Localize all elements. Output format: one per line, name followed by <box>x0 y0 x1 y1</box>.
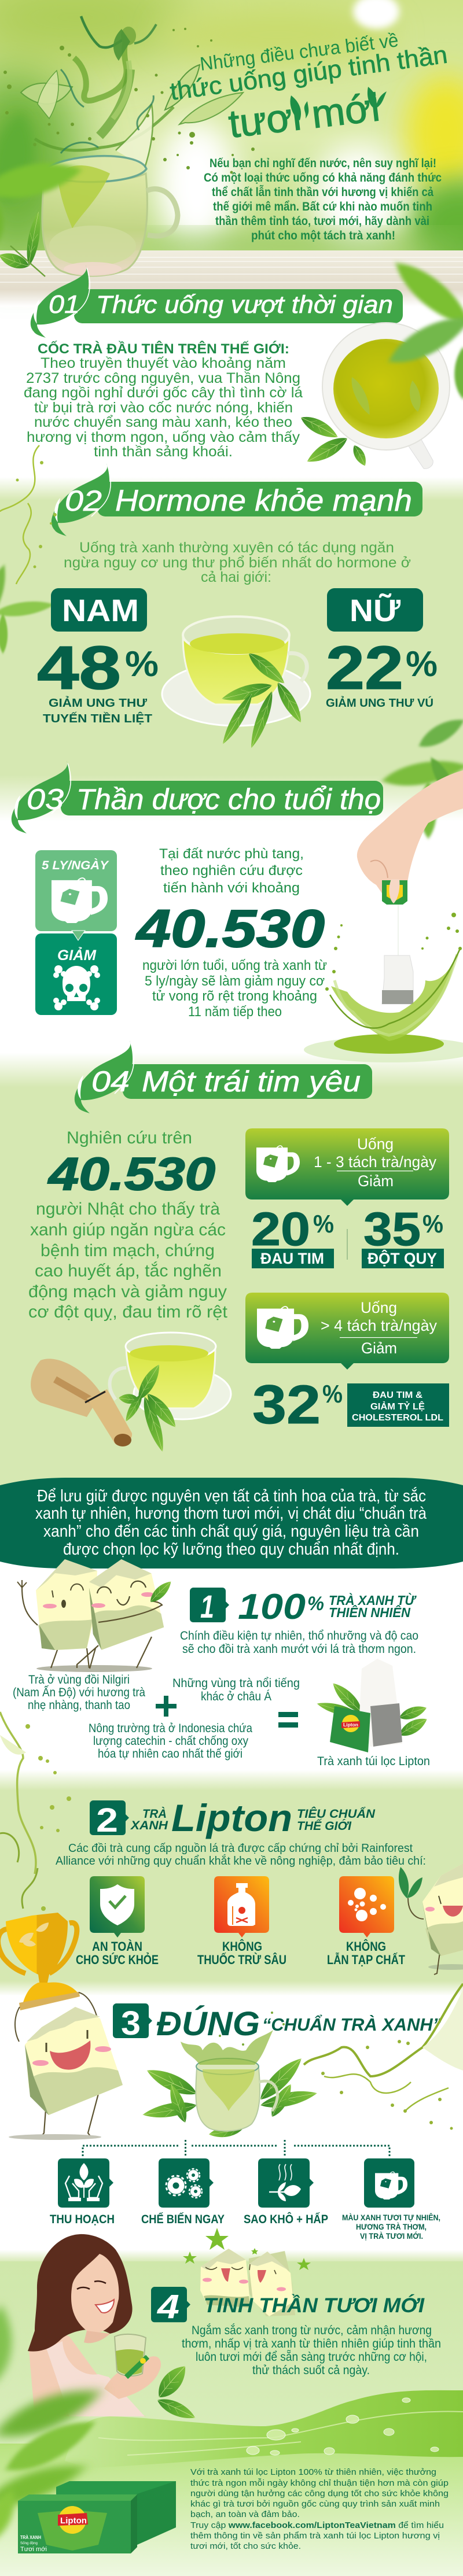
section heading 03: Thần dược cho tuổi thọ <box>76 783 381 815</box>
text: Nilgiri region: Trà ở vùng đồi Nilgiri <box>28 1673 130 1686</box>
wooden table <box>0 250 463 307</box>
text block: first cup of tea: tinh thần sảng khoái. <box>94 444 233 460</box>
heading: 100% natural green tea <box>190 1587 417 1627</box>
text: longevity study: người lớn tuổi, uống trà xanh từ <box>142 958 327 973</box>
panel: dark green statement: xanh” cho đến các tinh chất quý giá, nguyên liệu trà cần <box>43 1522 419 1541</box>
text: natural conditions: sẽ cho đồi trà xanh mướt với lá trà thơm ngon. <box>182 1643 416 1656</box>
text: other Asian tea regions: Những vùng trà nổi tiếng <box>172 1677 300 1690</box>
illustration: hand holding tea bag <box>357 770 463 1004</box>
icon: hands and plant <box>74 2163 94 2198</box>
text: closing note: thêm thông tin về sản phẩm trà xanh túi lọc Lipton hương vị <box>190 2531 440 2541</box>
panel: 1-3 cups <box>245 1128 449 1206</box>
heading: Lipton world standard: TRÀ <box>142 1807 167 1821</box>
text: fresh spirit: Ngắm sắc xanh trong từ nước, cảm nhận hương <box>192 2324 432 2337</box>
illustration: woman drinking tea <box>28 2234 161 2416</box>
text: Indonesia plantation: lượng catechin - chất chống oxy <box>93 1734 248 1748</box>
card: no pesticide: KHÔNG <box>222 1939 262 1954</box>
card: safe for health: CHO SỨC KHỎE <box>76 1953 159 1967</box>
text: Indonesia plantation <box>89 1722 252 1761</box>
tea bag <box>382 955 413 1004</box>
heading: 100% natural green tea: THIÊN NHIÊN <box>329 1604 410 1620</box>
icon: mug <box>375 2172 407 2199</box>
section heading 01 <box>31 265 403 338</box>
text: heart study: 40.530 <box>47 1148 215 1200</box>
panel: 5 cups a day <box>35 850 117 1015</box>
icon: mug <box>256 1146 300 1182</box>
heading: 100% natural green tea: 100 <box>238 1587 306 1627</box>
intro text: thần thêm tỉnh táo, tươi mới, hãy dành vài <box>215 215 429 228</box>
panel: dark green statement: xanh tự nhiên, hương thơm tươi mới, vị chát dịu “chuẩn trà <box>35 1504 427 1523</box>
title <box>168 29 449 146</box>
illustration: water stream on right <box>304 1984 463 2130</box>
text: closing note: bạch, an toàn và đảm bảo. <box>190 2509 300 2519</box>
text: fresh spirit: thơm, nhấp vị trà xanh từ thiên nhiên giúp tinh thần <box>182 2337 441 2350</box>
stat: female 22%: % <box>406 644 438 684</box>
illustration: leaves behind woman <box>152 2360 198 2424</box>
heading: 100% natural green tea: 1 <box>200 1588 214 1625</box>
heading: 4 fresh spirit: TINH THẦN TƯƠI MỚI <box>204 2294 425 2317</box>
text: longevity study: 11 năm tiếp theo <box>188 1004 282 1020</box>
section heading 04: Một trái tim yêu <box>142 1065 361 1098</box>
card: no impurity: LẪN TẠP CHẤT <box>327 1952 405 1967</box>
text: longevity study: tiến hành với khoảng <box>163 880 300 896</box>
stat: 35% stroke: 35 <box>363 1203 421 1256</box>
text: hormone intro <box>64 540 411 585</box>
illustration: glass with leaves and splash <box>142 2012 318 2140</box>
illustration: blurred leaves behind hand <box>420 781 436 839</box>
card: no impurity: KHÔNG <box>346 1939 386 1954</box>
stat: 35% stroke: ĐỘT QUỴ <box>368 1249 437 1267</box>
text: fresh spirit: luôn tươi mới để sẵn sàng trước những cơ hội, <box>196 2350 427 2364</box>
text: longevity study: 40.530 <box>135 899 325 958</box>
icon: mug <box>257 1307 308 1349</box>
step: result: VỊ TRÀ TƯƠI MỚI. <box>360 2231 423 2241</box>
heading: 4 fresh spirit: 4 <box>157 2288 179 2326</box>
stat: 32% <box>252 1374 449 1435</box>
illustration: matcha whisk and tea <box>31 1333 231 1453</box>
hero illustration: water figure splash <box>3 16 255 174</box>
panel: dark green statement: Để lưu giữ được nguyên vẹn tất cả tinh hoa của trà, từ sắc <box>37 1486 426 1505</box>
text: closing note: tươi mới, tốt cho sức khỏe. <box>190 2541 301 2551</box>
text: Indonesia plantation: hóa tự nhiên cao nhất thế giới <box>98 1747 242 1761</box>
stat: female 22%: 22 <box>326 634 403 702</box>
stat: male 48%: 48 <box>37 634 121 702</box>
panel: 5 cups a day: GIẢM <box>57 946 97 964</box>
section heading 03 <box>12 761 383 833</box>
text: Rainforest Alliance: Alliance với những quy chuẩn khắt khe về nông nghiệp, đảm bảo tiêu chí: <box>56 1854 426 1868</box>
heading: Lipton world standard: TIÊU CHUẨN <box>297 1807 376 1821</box>
text: Rainforest Alliance: Các đồi trà cung cấp nguồn lá trà được cấp chứng chỉ bởi Rainforest <box>68 1842 413 1855</box>
step: immediate processing <box>141 2158 225 2226</box>
panel: more than 4 cups: > 4 tách trà/ngày <box>321 1317 437 1334</box>
text: Nilgiri region: nhẹ nhàng, thanh tao <box>28 1699 130 1712</box>
splash and leaves left of section 02 <box>0 445 57 654</box>
text: natural conditions <box>180 1629 418 1656</box>
section heading 01: 01 <box>49 290 80 319</box>
icon: shield <box>100 1884 134 1925</box>
panel: 1-3 cups: Giảm <box>358 1172 394 1190</box>
hero blurred leaves <box>0 108 463 336</box>
illustration: tea bag with leaf on right <box>399 1863 463 1975</box>
connector: dotted lines <box>83 2140 389 2156</box>
icon: particles <box>348 1888 386 1921</box>
text: longevity study: theo nghiên cứu được <box>160 863 303 879</box>
illustration: Lipton product boxes: Sống động <box>20 2542 38 2545</box>
text block: first cup of tea: CỐC TRÀ ĐẦU TIÊN TRÊN THẾ GIỚI: <box>38 341 289 357</box>
stat: 35% stroke <box>347 1203 444 1268</box>
text: Nilgiri region: (Nam Ấn Độ) với hương trà <box>13 1686 145 1699</box>
heading: Lipton world standard: THẾ GIỚI <box>297 1819 352 1833</box>
icon: poison bottle <box>227 1883 255 1926</box>
heading: Lipton world standard: XANH <box>130 1819 168 1832</box>
stat: 32%: % <box>322 1380 343 1408</box>
stat: 20% heart attack: ĐAU TIM <box>260 1250 324 1267</box>
stat: female 22%: NỮ <box>350 593 400 628</box>
step: result: MÀU XANH TƯƠI TỰ NHIÊN, <box>342 2212 440 2222</box>
text block: first cup of tea <box>24 341 303 460</box>
text block: first cup of tea: từ bụi trà rơi vào cốc nước nóng, khiến <box>34 400 293 416</box>
icon: steam and leaf <box>279 2164 292 2180</box>
text: Nilgiri region <box>13 1673 145 1712</box>
panel: 1-3 cups: Uống <box>357 1135 394 1153</box>
text: closing note: thức trà ngon mỗi ngày không chỉ thuận tiện hơn mà còn giúp <box>190 2478 449 2488</box>
heading: 100% natural green tea: TRÀ XANH TỪ <box>329 1592 417 1608</box>
heading: Lipton world standard: Lipton <box>171 1796 292 1839</box>
title: thức uống giúp tinh thần <box>168 41 449 106</box>
heading: Lipton world standard: 2 <box>96 1802 118 1839</box>
icon: skull <box>53 965 100 1010</box>
text: closing note: người dùng tận hưởng các công dụng tốt cho sức khỏe không <box>190 2489 449 2499</box>
title: tươi mới <box>226 85 382 146</box>
text: other Asian tea regions: khác ở châu Á <box>201 1690 271 1703</box>
text: heart study: Nghiên cứu trên <box>67 1128 192 1147</box>
blurred leaves top right <box>383 306 463 399</box>
stat: 35% stroke: % <box>422 1210 443 1238</box>
icon: mug <box>52 878 108 923</box>
illustration: happy tea bags with stars <box>183 2228 311 2316</box>
text: hormone intro: ngừa nguy cơ ung thư phổ biến nhất do hormone ở <box>64 555 411 571</box>
text: heart study: động mạch và giảm nguy <box>28 1282 227 1301</box>
step: roast and steam <box>244 2158 328 2226</box>
illustration: trophy and happy tea bag <box>0 1913 123 2140</box>
heading: Lipton world standard <box>90 1796 376 1839</box>
stat: 32%: ĐAU TIM & <box>373 1390 422 1400</box>
illustration: two tea bag characters <box>17 1559 174 1672</box>
illustration: tea cup on saucer <box>162 617 310 750</box>
illustration: green tea wave <box>65 2390 463 2468</box>
stat: 32%: CHOLESTEROL LDL <box>352 1413 443 1423</box>
card: no impurity <box>327 1876 405 1967</box>
intro text: thể chất lẫn tinh thần với hương vị khiến cả <box>212 185 433 199</box>
panel: 1-3 cups: 1 - 3 tách trà/ngày <box>314 1153 436 1171</box>
text block: first cup of tea: Theo truyền thuyết vào khoảng năm <box>41 355 286 371</box>
step: result: HƯƠNG TRÀ THƠM, <box>356 2222 427 2231</box>
text: hormone intro: Uống trà xanh thường xuyên có tác dụng ngăn <box>79 540 394 556</box>
text: heart study <box>28 1128 228 1322</box>
icon: gears <box>166 2169 202 2198</box>
title: Những điều chưa biết về <box>199 29 399 75</box>
section heading 01: Thức uống vượt thời gian <box>96 291 393 319</box>
illustration: top view tea cup <box>298 323 450 468</box>
text: closing note: Với trà xanh túi lọc Lipton 100% từ thiên nhiên, việc thưởng <box>190 2467 436 2477</box>
heading: 3 right green tea standards: ĐÚNG <box>156 2005 260 2043</box>
section heading 04: 04 <box>91 1065 130 1098</box>
text block: first cup of tea: 2737 trước công nguyên, vua Thần Nông <box>26 370 300 386</box>
heading: 100% natural green tea: % <box>307 1593 324 1615</box>
icon: stars <box>183 2228 311 2270</box>
card: safe for health: AN TOÀN <box>92 1939 142 1954</box>
step: harvest <box>50 2158 115 2226</box>
text block: first cup of tea: hương vị thơm ngon, uống vào cảm thấy <box>27 429 300 445</box>
section heading 04 <box>75 1040 372 1113</box>
text: longevity study <box>135 846 327 1020</box>
illustration: Lipton tea bag: Lipton <box>343 1722 358 1728</box>
step: harvest: THU HOẠCH <box>50 2213 115 2226</box>
step: result <box>342 2158 440 2241</box>
text: closing note <box>190 2467 449 2551</box>
text: longevity study: tử vong rõ rệt trong khoảng <box>152 988 317 1004</box>
heading: 3 right green tea standards: 3 <box>121 2005 141 2042</box>
stat: male 48%: NAM <box>62 593 139 628</box>
card: safe for health <box>76 1876 159 1967</box>
text: longevity study: Tại đất nước phù tang, <box>159 846 304 862</box>
step: immediate processing: CHẾ BIẾN NGAY <box>141 2213 225 2226</box>
text: heart study: người Nhật cho thấy trà <box>36 1200 220 1219</box>
intro text: Có một loại thức uống có khả năng đánh thức <box>204 171 442 184</box>
text: heart study: cơ đột quỵ, đau tim rõ rệt <box>28 1302 228 1322</box>
text: heart study: bệnh tim mạch, chứng <box>41 1241 215 1260</box>
stat: female 22% <box>326 588 438 710</box>
illustration: Lipton product boxes <box>18 2481 176 2553</box>
stat: male 48%: GIẢM UNG THƯ <box>49 696 147 710</box>
icon: title sprout leaves <box>290 87 387 120</box>
panel: more than 4 cups: Uống <box>361 1299 397 1316</box>
stat: male 48%: % <box>125 644 159 684</box>
text: longevity study: 5 ly/ngày sẽ làm giảm nguy cơ <box>145 973 325 989</box>
section heading 02 <box>52 463 422 536</box>
icon: equals <box>278 1712 298 1728</box>
stat: 32%: GIẢM TỶ LỆ <box>370 1401 425 1412</box>
text block: first cup of tea: đang ngồi nghỉ dưới gốc cây thì tình cờ lá <box>24 385 303 401</box>
stat: 32%: 32 <box>252 1374 321 1435</box>
stat: 20% heart attack: 20 <box>251 1203 310 1256</box>
icon: plus <box>156 1696 177 1717</box>
card: no pesticide <box>197 1876 286 1967</box>
illustration: blurred leaves foreground <box>0 2304 107 2547</box>
text block: first cup of tea: nước chuyển sang màu xanh, kéo theo <box>34 414 292 430</box>
card: no pesticide: THUỐC TRỪ SÂU <box>197 1952 286 1967</box>
stat: male 48% <box>37 588 159 725</box>
intro text <box>204 157 442 242</box>
text: fresh spirit <box>182 2324 441 2377</box>
heading: 3 right green tea standards <box>113 2003 442 2043</box>
intro text: phút cho một tách trà xanh! <box>251 229 395 242</box>
panel: dark green statement <box>0 1478 463 1569</box>
splash left of section 2 <box>0 1712 71 1911</box>
text: fresh spirit: thử thách suốt cả ngày. <box>252 2364 370 2377</box>
text: closing note: khác gì trà tươi bởi nguồn gốc cùng quy trình sản xuất minh <box>190 2499 440 2509</box>
step: roast and steam: SAO KHÔ + HẤP <box>244 2212 328 2226</box>
text: other Asian tea regions <box>172 1677 300 1703</box>
text: hormone intro: cả hai giới: <box>201 569 271 585</box>
heading: 3 right green tea standards: “CHUẨN TRÀ XANH” <box>262 2014 442 2035</box>
intro text: Nếu bạn chỉ nghĩ đến nước, nên suy nghĩ lại! <box>210 157 436 170</box>
panel: 5 cups a day: 5 LY/NGÀY <box>42 859 109 872</box>
section heading 03: 03 <box>27 783 64 815</box>
text: heart study: xanh giúp ngăn ngừa các <box>30 1220 226 1239</box>
caption: Lipton tea bag: Trà xanh túi lọc Lipton <box>317 1755 430 1768</box>
illustration: Lipton product boxes: Tươi mới <box>20 2546 47 2553</box>
panel: more than 4 cups <box>245 1293 449 1370</box>
text: natural conditions: Chính điều kiện tự nhiên, thổ nhưỡng và độ cao <box>180 1629 418 1643</box>
leaves bottom right of section 02 <box>380 713 463 806</box>
intro text: thế giới mê mẩn. Bất cứ khi nào muốn tinh <box>213 200 432 213</box>
panel: more than 4 cups: Giảm <box>361 1339 397 1357</box>
stat: 20% heart attack: % <box>313 1210 334 1238</box>
text: heart study: cao huyết áp, tắc nghẽn <box>35 1261 222 1280</box>
text: Rainforest Alliance <box>56 1842 426 1868</box>
section heading 02: Hormone khỏe mạnh <box>115 484 412 518</box>
stat: 20% heart attack <box>251 1203 334 1268</box>
heading: 4 fresh spirit <box>151 2287 425 2326</box>
illustration: splash crown <box>304 913 463 1062</box>
illustration: Lipton product boxes: Lipton <box>60 2516 87 2526</box>
hero background glow <box>0 0 463 272</box>
hero illustration: glass mug <box>42 156 178 276</box>
text: Indonesia plantation: Nông trường trà ở Indonesia chứa <box>89 1722 252 1735</box>
stat: male 48%: TUYẾN TIỀN LIỆT <box>43 711 152 725</box>
illustration: Lipton product boxes: TRÀ XANH <box>20 2535 41 2540</box>
section heading 02: 02 <box>65 485 102 517</box>
text: closing note: Truy cập www.facebook.com/LiptonTeaVietnam để tìm hiểu <box>190 2520 444 2530</box>
panel: dark green statement: được chọn lọc kỹ lưỡng theo quy chuẩn nhất định. <box>63 1540 399 1559</box>
stat: female 22%: GIẢM UNG THƯ VÚ <box>326 696 433 710</box>
illustration: Lipton tea bag <box>315 1659 430 1752</box>
